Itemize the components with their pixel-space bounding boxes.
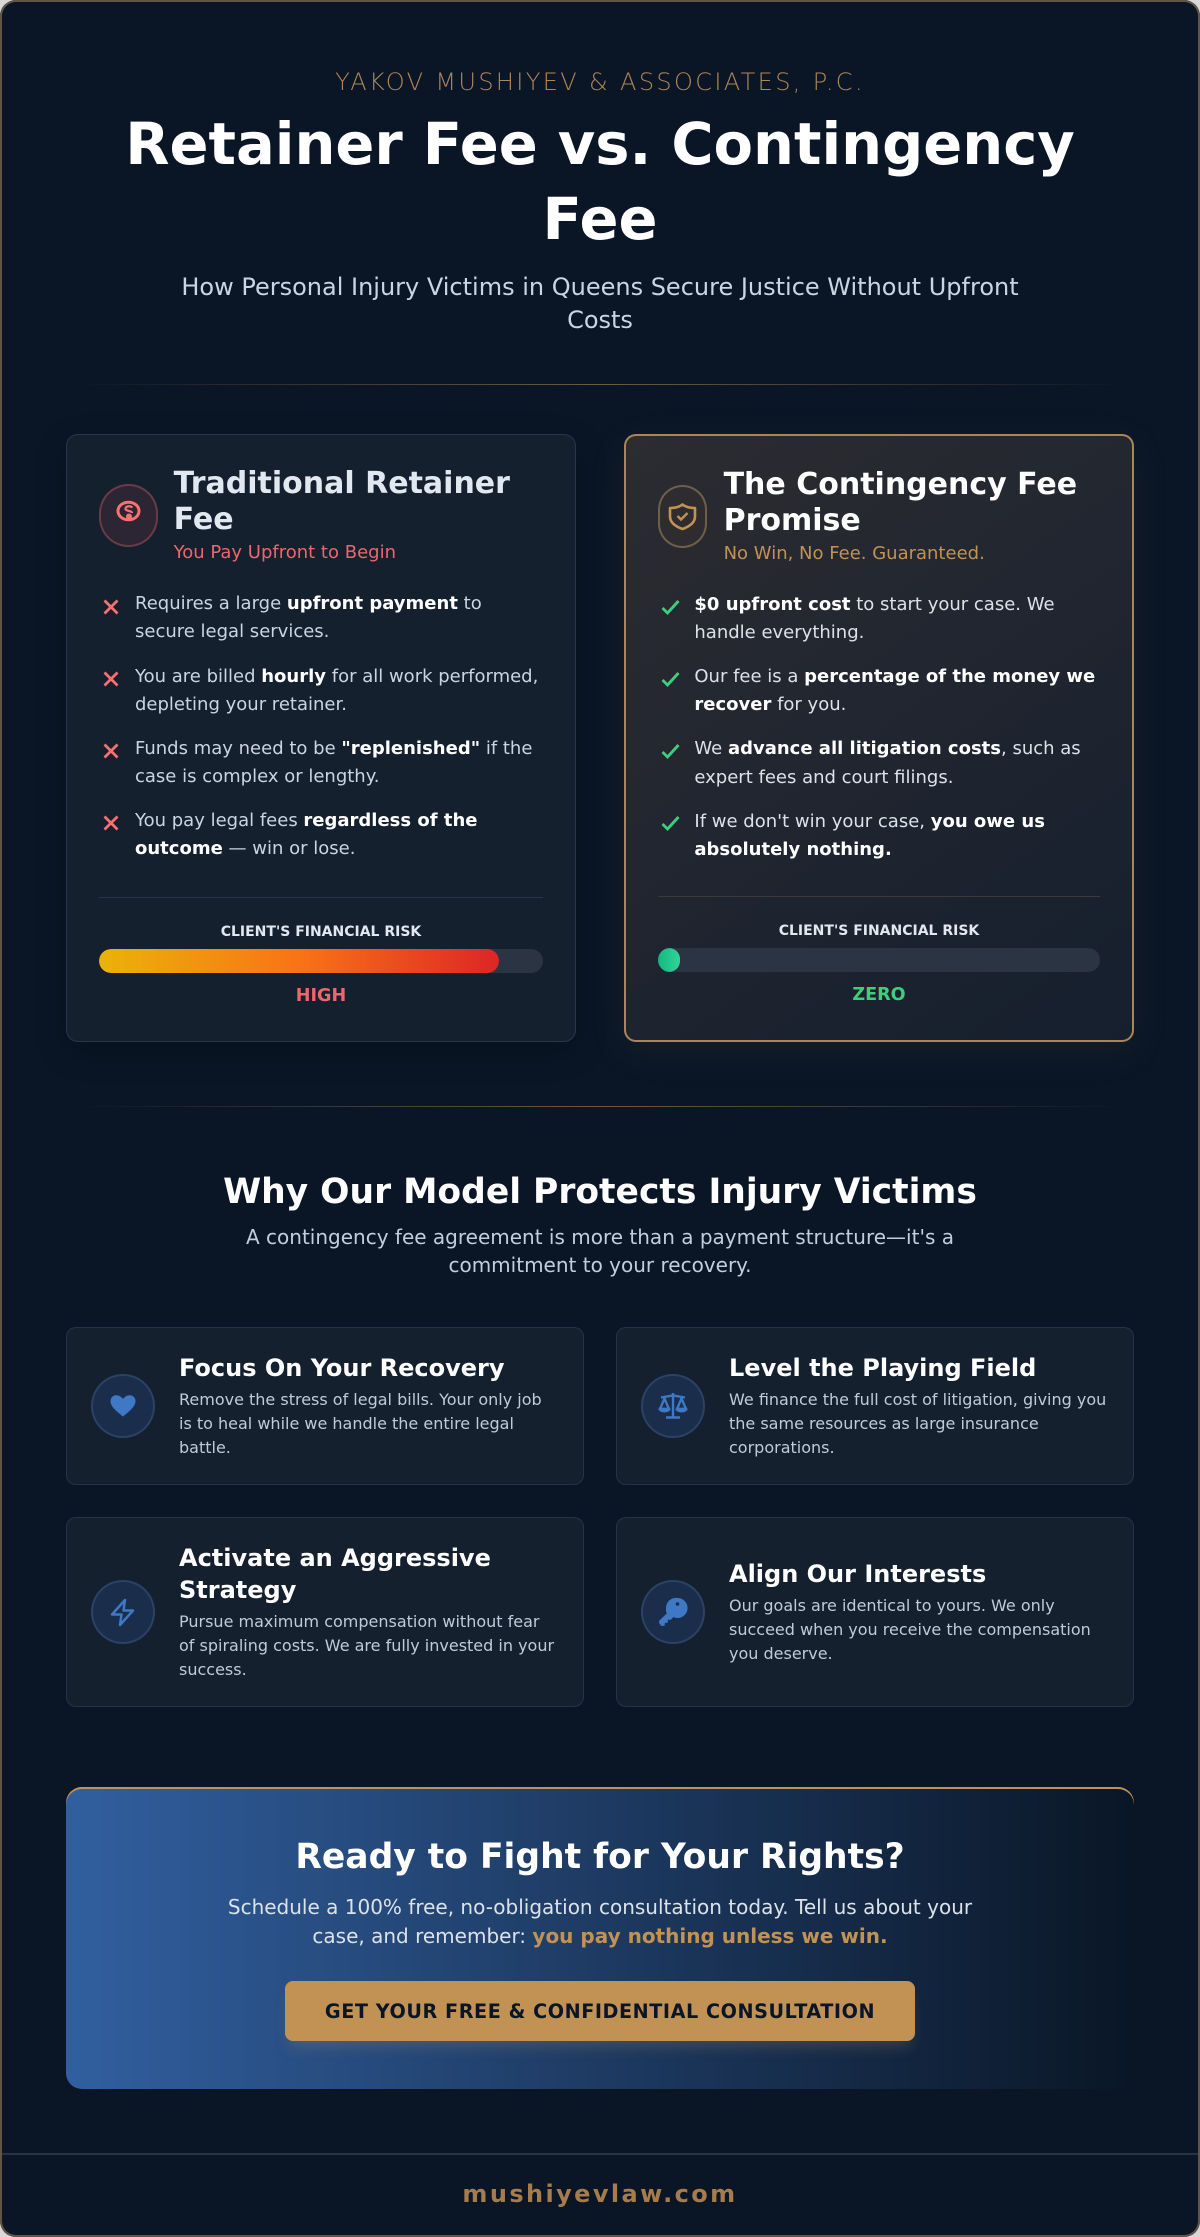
drawback 2: You are billed hourly for all work performed,: [135, 666, 538, 686]
title: Retainer Fee vs. Contingency: [125, 110, 1075, 178]
cta text: case, and remember: you pay nothing unless we win.: [312, 1924, 888, 1948]
subtitle: Costs: [567, 306, 633, 334]
heading: traditional retainer fee: Traditional Retainer: [174, 466, 510, 501]
cta text: [228, 1895, 972, 1948]
benefit 1: handle everything.: [694, 622, 864, 643]
section heading: Why Our Model Protects Injury Victims: [223, 1172, 977, 1212]
risk label: CLIENT'S FINANCIAL RISK: [221, 924, 421, 940]
heading: contingency fee promise: [724, 467, 1077, 538]
risk meter: high: [99, 924, 543, 1006]
card title: Strategy: [179, 1576, 296, 1604]
card text: the same resources as large insurance: [729, 1414, 1039, 1433]
icon: shield check: [658, 485, 707, 548]
cta heading: Ready to Fight for Your Rights?: [295, 1837, 905, 1877]
footer: website: mushiyevlaw.com: [462, 2180, 738, 2208]
benefit 1: [662, 594, 1055, 643]
call to action panel: [66, 1787, 1134, 2089]
card text: Our goals are identical to yours. We only: [729, 1596, 1055, 1615]
drawback 2: depleting your retainer.: [135, 694, 347, 715]
title: Fee: [543, 186, 657, 252]
icon: retainer money: [99, 484, 158, 547]
drawback 3: [104, 738, 532, 787]
card title: Level the Playing Field: [729, 1354, 1036, 1382]
risk value: ZERO: [852, 984, 906, 1004]
icon: heart: [91, 1374, 155, 1438]
drawback 2: [104, 666, 538, 715]
icon: lightning bolt: [91, 1580, 155, 1644]
icon: key: [641, 1580, 705, 1644]
card text: [729, 1390, 1106, 1457]
benefit 3: expert fees and court filings.: [694, 767, 953, 788]
card text: We finance the full cost of litigation, giving you: [729, 1390, 1106, 1409]
card text: [729, 1596, 1091, 1663]
eyebrow: firm name: YAKOV MUSHIYEV & ASSOCIATES, P.C.: [335, 68, 865, 96]
benefit 2: [662, 666, 1095, 715]
card: activate an aggressive strategy: [66, 1517, 584, 1707]
drawback 1: [104, 593, 482, 642]
heading: contingency fee promise: Promise: [724, 502, 861, 538]
cta button: [285, 1981, 915, 2041]
heading: traditional retainer fee: Fee: [174, 502, 234, 536]
risk bar 90 percent: [99, 949, 543, 973]
icon: scales: [641, 1374, 705, 1438]
card text: Pursue maximum compensation without fear: [179, 1612, 539, 1631]
section intro: A contingency fee agreement is more than a payment structure—it's a: [246, 1225, 954, 1249]
tagline: No Win, No Fee. Guaranteed.: [724, 543, 985, 564]
drawback 1: Requires a large upfront payment to: [135, 593, 482, 614]
subtitle: [181, 273, 1019, 334]
drawback 3: case is complex or lengthy.: [135, 766, 380, 787]
drawback 3: Funds may need to be "replenished" if the: [135, 738, 532, 759]
drawback 4: You pay legal fees regardless of the: [135, 810, 477, 831]
section intro: [246, 1225, 954, 1277]
card: focus on your recovery: [66, 1327, 584, 1485]
card text: [179, 1390, 542, 1457]
card text: [179, 1612, 554, 1679]
card text: succeed when you receive the compensation: [729, 1620, 1091, 1639]
card text: battle.: [179, 1438, 231, 1457]
heading: contingency fee promise: The Contingency Fee: [724, 467, 1077, 502]
list: retainer drawbacks: [104, 593, 538, 859]
benefit 3: [662, 738, 1081, 788]
card title: Focus On Your Recovery: [179, 1354, 505, 1382]
card text: is to heal while we handle the entire legal: [179, 1414, 514, 1433]
panel: contingency fee promise: [624, 434, 1134, 1042]
card text: Remove the stress of legal bills. Your only job: [179, 1390, 542, 1409]
benefit 4: If we don't win your case, you owe us: [694, 811, 1045, 832]
card text: of spiraling costs. We are fully invested in your: [179, 1636, 554, 1655]
benefit 3: We advance all litigation costs, such as: [694, 738, 1081, 759]
risk meter: zero: [658, 923, 1100, 1004]
heading: traditional retainer fee: [174, 466, 510, 536]
drawback 4: [104, 810, 477, 859]
list: contingency benefits: [662, 594, 1095, 860]
drawback 1: secure legal services.: [135, 621, 329, 642]
tagline: You Pay Upfront to Begin: [174, 542, 396, 563]
card text: corporations.: [729, 1438, 835, 1457]
cta button: GET YOUR FREE & CONFIDENTIAL CONSULTATION: [325, 2000, 875, 2023]
risk value: HIGH: [296, 986, 346, 1006]
benefit 4: absolutely nothing.: [694, 839, 892, 860]
risk bar 5 percent: [658, 948, 1100, 972]
cta text: Schedule a 100% free, no-obligation consultation today. Tell us about your: [228, 1895, 972, 1919]
card text: you deserve.: [729, 1644, 833, 1663]
benefit 4: [662, 811, 1045, 860]
benefit 2: recover for you.: [694, 694, 846, 715]
risk label: CLIENT'S FINANCIAL RISK: [779, 923, 979, 939]
card text: success.: [179, 1660, 247, 1679]
subtitle: How Personal Injury Victims in Queens Secure Justice Without Upfront: [181, 273, 1019, 301]
card: level the playing field: [616, 1327, 1134, 1485]
panel: traditional retainer fee: [66, 434, 576, 1042]
benefit 2: Our fee is a percentage of the money we: [694, 666, 1095, 687]
title: [125, 110, 1075, 252]
card title: [179, 1544, 491, 1604]
drawback 4: outcome — win or lose.: [135, 838, 355, 859]
card: align our interests: [616, 1517, 1134, 1707]
card title: Activate an Aggressive: [179, 1544, 491, 1572]
section intro: commitment to your recovery.: [448, 1253, 752, 1277]
benefit 1: $0 upfront cost to start your case. We: [694, 594, 1055, 615]
card title: Align Our Interests: [729, 1560, 986, 1588]
